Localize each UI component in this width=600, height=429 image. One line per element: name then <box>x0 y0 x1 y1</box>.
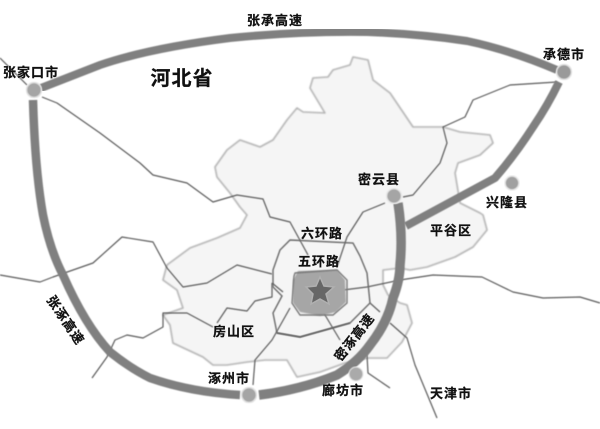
node: Chengde <box>556 64 572 80</box>
label: Tianjin city: 天津市 <box>430 386 472 401</box>
label: Chengde: 承德市 <box>543 47 585 62</box>
label: Fangshan district: 房山区 <box>213 324 255 339</box>
label: Fifth ring road: 五环路 <box>298 254 340 269</box>
icon: Beijing star <box>306 277 334 304</box>
label: Zhangcheng expressway: 张承高速 <box>247 13 303 28</box>
label: Zhuozhou city: 涿州市 <box>208 371 250 386</box>
label: Mizhuo expressway: 密涿高速 <box>331 311 378 364</box>
node: Miyun <box>386 188 402 204</box>
fifth ring road <box>292 270 347 315</box>
node: Zhangjiakou <box>26 82 42 98</box>
sixth ring road <box>273 240 370 337</box>
node: Langfang <box>349 367 363 381</box>
expressway: Zhangcheng <box>41 32 557 88</box>
label: Miyun county: 密云县 <box>358 172 400 187</box>
label: Xinglong county: 兴隆县 <box>486 195 528 210</box>
label: Pinggu district: 平谷区 <box>430 223 472 238</box>
label: Sixth ring road: 六环路 <box>301 226 343 241</box>
node: Xinglong <box>505 176 519 190</box>
node: Zhuozhou <box>242 388 256 402</box>
label: Zhangzhuo expressway: 张涿高速 <box>44 293 87 348</box>
expressway: Zhangzhuo <box>33 100 240 395</box>
label: Langfang city: 廊坊市 <box>322 383 364 398</box>
expressway: Mizhuo <box>259 203 401 395</box>
heading: Hebei province: 河北省 <box>150 67 214 90</box>
Beijing region shape <box>163 57 493 377</box>
central city area <box>293 270 346 316</box>
label: Zhangjiakou: 张家口市 <box>3 65 59 80</box>
expressway: Chengde to Miyun branch <box>406 82 559 226</box>
